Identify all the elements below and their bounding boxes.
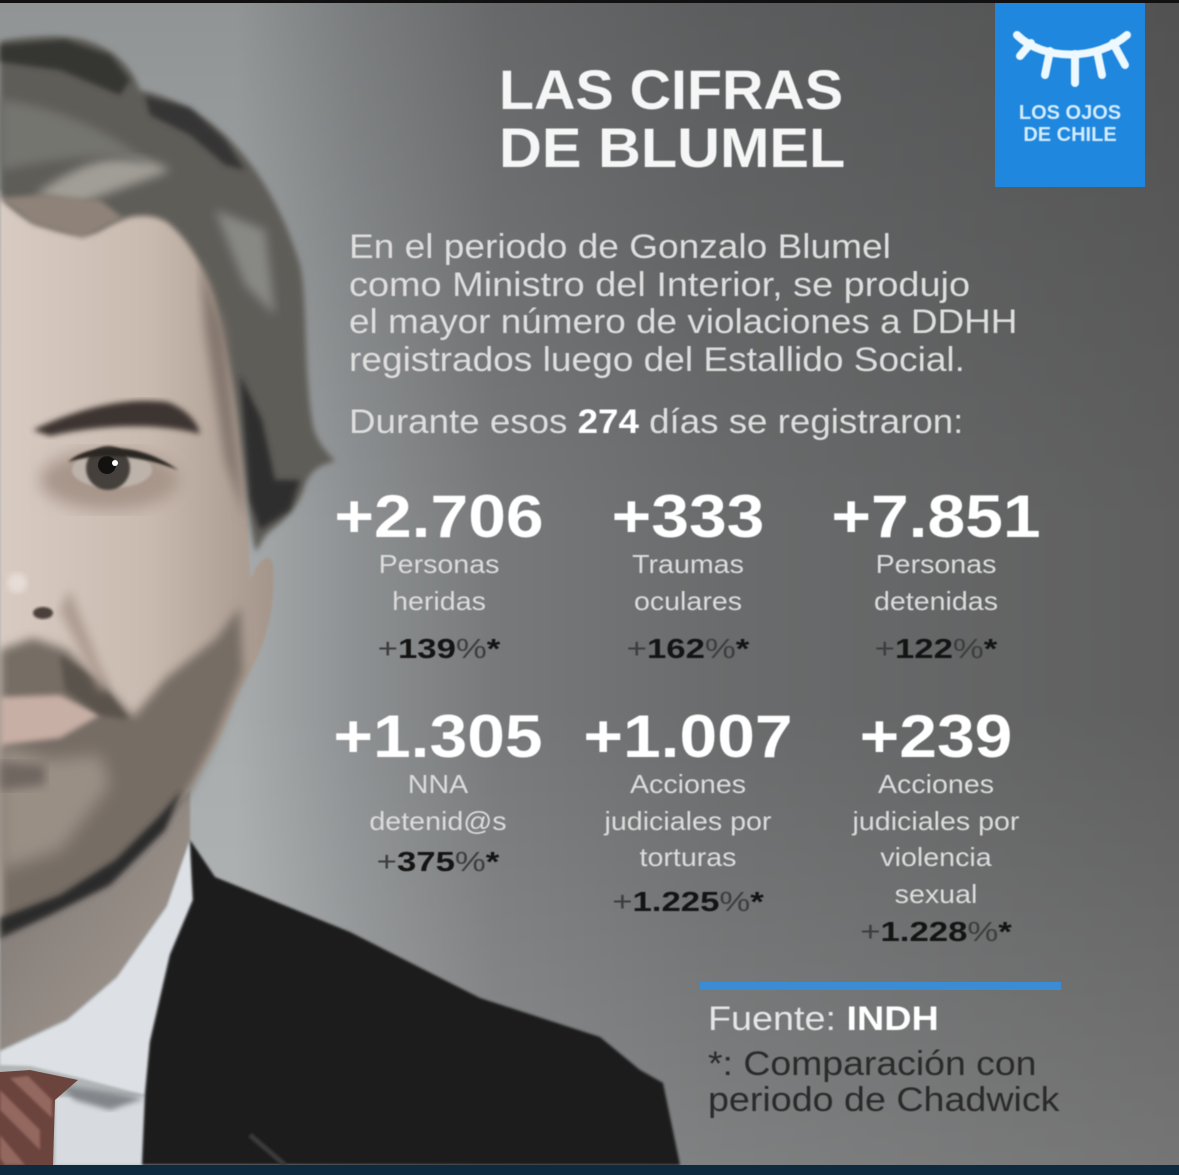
tie stripes [0, 1076, 52, 1165]
stat: personas detenidas: +7.851 [831, 483, 1041, 550]
stat: personas detenidas: Personas [876, 549, 996, 579]
stat: traumas oculares: Traumas [632, 549, 744, 579]
logo [995, 3, 1145, 187]
collar shadow [60, 1085, 145, 1110]
stat: acciones por violencia sexual: +1.228%* [860, 916, 1012, 947]
neck [0, 790, 190, 1050]
stat: acciones por violencia sexual: Acciones [878, 769, 994, 799]
stat: traumas oculares [612, 483, 764, 664]
forehead hairline shadow [0, 195, 123, 238]
stat: acciones por torturas: +1.007 [583, 703, 793, 770]
title: DE BLUMEL [499, 116, 845, 179]
stat: personas detenidas: +122%* [875, 633, 997, 664]
source: Fuente: INDH [708, 1000, 939, 1038]
stat: traumas oculares: +333 [612, 483, 764, 550]
intro text: registrados luego del Estallido Social. [349, 340, 965, 378]
stat: acciones por torturas: +1.225%* [612, 886, 764, 916]
icon: closed eye with lashes [1012, 30, 1132, 88]
nose [33, 607, 53, 619]
hair dark strands [0, 40, 130, 95]
stat: NNA detenidos: detenid@s [369, 806, 507, 836]
lips [0, 695, 100, 745]
stat: acciones por violencia sexual: violencia [880, 842, 992, 872]
eyebrow [33, 401, 200, 436]
title: LAS CIFRAS [499, 58, 843, 121]
hair highlights [35, 157, 170, 205]
stat: personas heridas: Personas [379, 549, 499, 579]
eye socket shadow [40, 450, 180, 510]
stat: personas heridas [334, 483, 544, 664]
stat: acciones por torturas: Acciones [630, 769, 746, 799]
intro text: En el periodo de Gonzalo Blumel [349, 228, 891, 266]
hair [0, 36, 335, 552]
shirt collar [0, 840, 193, 1095]
stat: personas heridas: +139%* [378, 633, 500, 664]
eye [72, 452, 152, 488]
logo wordmark: LOS OJOS [1019, 102, 1121, 124]
footnote: *: Comparación con [708, 1045, 1036, 1083]
stat: traumas oculares: +162%* [627, 633, 749, 664]
under lip shadow [0, 762, 45, 790]
beard [0, 607, 243, 935]
intro text: el mayor número de violaciones a DDHH [349, 303, 1017, 341]
stat: acciones por torturas [583, 703, 793, 916]
stat: traumas oculares: oculares [634, 586, 742, 616]
subheading: Durante esos 274 días se registraron: [349, 403, 963, 441]
stat: acciones por violencia sexual [851, 703, 1020, 947]
logo wordmark [1019, 102, 1121, 146]
tie [0, 1070, 78, 1165]
beard lower edge [0, 790, 182, 938]
stat: NNA detenidos: +375%* [377, 846, 499, 877]
shirt front [55, 1096, 146, 1165]
stat: NNA detenidos: NNA [408, 769, 468, 799]
intro text [349, 228, 1017, 379]
stat: personas heridas: +2.706 [334, 483, 544, 550]
stat: acciones por violencia sexual: sexual [895, 878, 977, 908]
source divider [700, 982, 1061, 990]
footnote [708, 1045, 1060, 1119]
face [0, 190, 274, 935]
stat: personas detenidas [831, 483, 1041, 664]
moustache dark [60, 655, 130, 720]
stat: personas heridas: heridas [392, 586, 486, 616]
chin beard patch [0, 745, 110, 870]
stat: NNA detenidos: +1.305 [333, 703, 543, 770]
stat: acciones por torturas: torturas [640, 842, 736, 872]
intro text: como Ministro del Interior, se produjo [349, 266, 970, 304]
stat: acciones por torturas: judiciales por [605, 806, 771, 836]
stat: personas detenidas: detenidas [874, 586, 998, 616]
stat: acciones por violencia sexual: +239 [860, 703, 1012, 770]
jacket [142, 840, 680, 1165]
title [499, 58, 845, 179]
temple shadow [200, 260, 245, 520]
stat: NNA detenidos [333, 703, 543, 877]
lapel stitching [250, 1135, 285, 1165]
logo wordmark: DE CHILE [1023, 124, 1117, 146]
stat: acciones por violencia sexual: judiciales por [853, 806, 1019, 836]
footnote: periodo de Chadwick [708, 1081, 1060, 1119]
